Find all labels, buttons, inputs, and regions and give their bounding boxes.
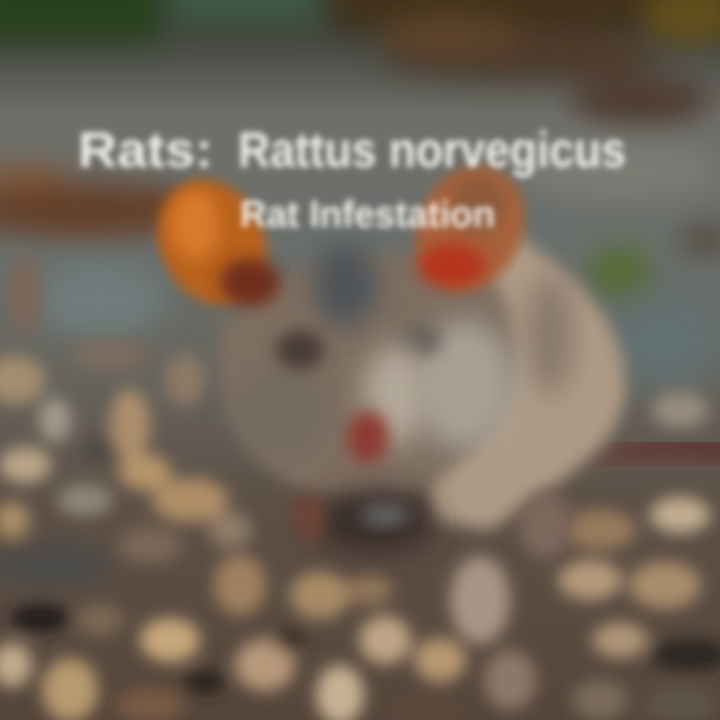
rat: right ear	[396, 148, 544, 308]
rat: right eye	[400, 324, 440, 356]
rat: head right light fur	[415, 320, 515, 450]
rat: left eye	[276, 330, 324, 370]
rat: left cheek	[235, 365, 325, 455]
rat: mouth	[313, 490, 437, 554]
rat: right paw	[519, 491, 571, 559]
rat: chin	[361, 503, 409, 527]
rat: muzzle	[363, 345, 427, 445]
ground: pebbles	[0, 253, 720, 720]
background: foliage and log at top	[0, 0, 720, 390]
rat tail	[585, 447, 720, 462]
rat: left paw	[292, 494, 324, 542]
rat: head	[219, 254, 514, 500]
title: Rat Infestation	[240, 194, 495, 236]
rat: body	[420, 225, 625, 530]
title	[78, 122, 626, 236]
rat figure	[138, 148, 625, 559]
rat: left ear	[138, 162, 286, 322]
rat: brow stripe	[313, 243, 377, 327]
title: Rattus norvegicus	[238, 122, 626, 178]
title: Rats:	[78, 122, 213, 178]
rat: nose	[348, 411, 388, 463]
rat: body shading	[528, 275, 572, 395]
